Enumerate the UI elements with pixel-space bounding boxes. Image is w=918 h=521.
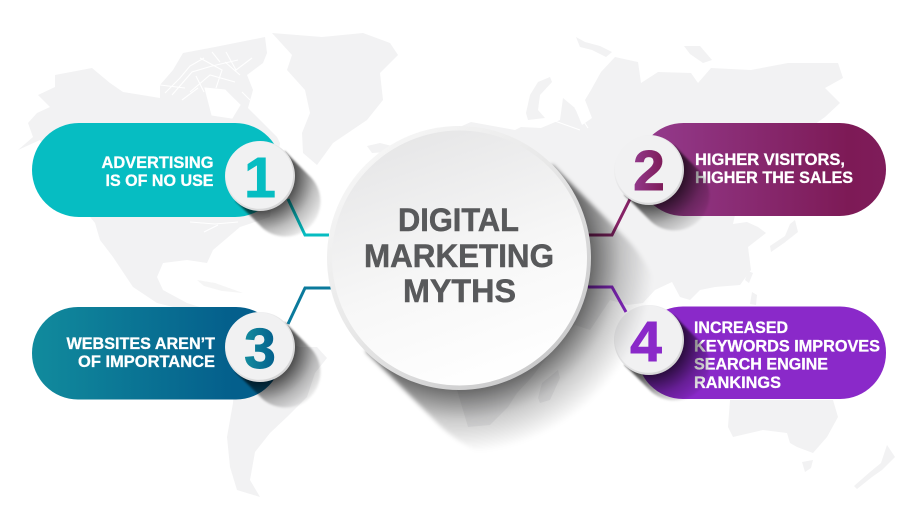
Tasmania: [802, 460, 813, 472]
Eurasia: [430, 57, 843, 330]
connector line 4: [588, 287, 626, 312]
pill 1 text: ADVERTISING: [102, 153, 214, 172]
number badge 1: [225, 141, 320, 236]
number badge 4: [614, 305, 709, 400]
connector line 3: [288, 288, 331, 324]
connector line 1: [288, 199, 329, 235]
pill 2: higher visitors: [637, 123, 886, 216]
number badge 3: [225, 312, 320, 407]
Taiwan and Philippines: [745, 271, 757, 305]
pill 4: increased keywords: [637, 306, 886, 399]
number badge 2: [614, 135, 709, 230]
pill 2 text: HIGHER THE SALES: [695, 168, 853, 187]
pill 4 text: SEARCH ENGINE: [694, 354, 828, 374]
Svalbard: [576, 37, 612, 57]
Australia: [728, 400, 838, 453]
pill 4 text: RANKINGS: [694, 373, 781, 392]
pill 4 text: KEYWORDS IMPROVES: [694, 336, 880, 356]
number badge 4: 4: [630, 310, 662, 374]
connector line 2: [588, 199, 630, 235]
pill 3 text: WEBSITES AREN’T: [66, 334, 216, 353]
central title: MARKETING: [364, 238, 554, 274]
pill 3: websites: [32, 307, 282, 400]
Severnaya Zemlya: [684, 46, 712, 63]
North America: [18, 37, 280, 340]
number badge 3: 3: [244, 317, 276, 381]
pill 4 text: INCREASED: [694, 318, 788, 337]
South America: [227, 340, 327, 497]
Japan: [770, 220, 798, 252]
pill 2 text: HIGHER VISITORS,: [695, 150, 845, 169]
Africa: [400, 270, 600, 427]
Greenland: [272, 33, 398, 165]
Scandinavia: [526, 77, 552, 120]
Iceland: [367, 143, 392, 153]
pill 3 text: OF IMPORTANCE: [78, 352, 215, 371]
Madagascar: [538, 370, 560, 403]
New Zealand: [854, 445, 895, 489]
central circle: [327, 126, 663, 462]
central title: DIGITAL: [398, 202, 519, 238]
central title: MYTHS: [403, 273, 516, 309]
number badge 2: 2: [633, 139, 665, 203]
pill 1 text: IS OF NO USE: [106, 171, 214, 190]
pill 1: advertising: [32, 123, 282, 217]
Cuba: [197, 280, 243, 293]
map gaps: [160, 52, 588, 232]
number badge 1: 1: [244, 146, 276, 210]
